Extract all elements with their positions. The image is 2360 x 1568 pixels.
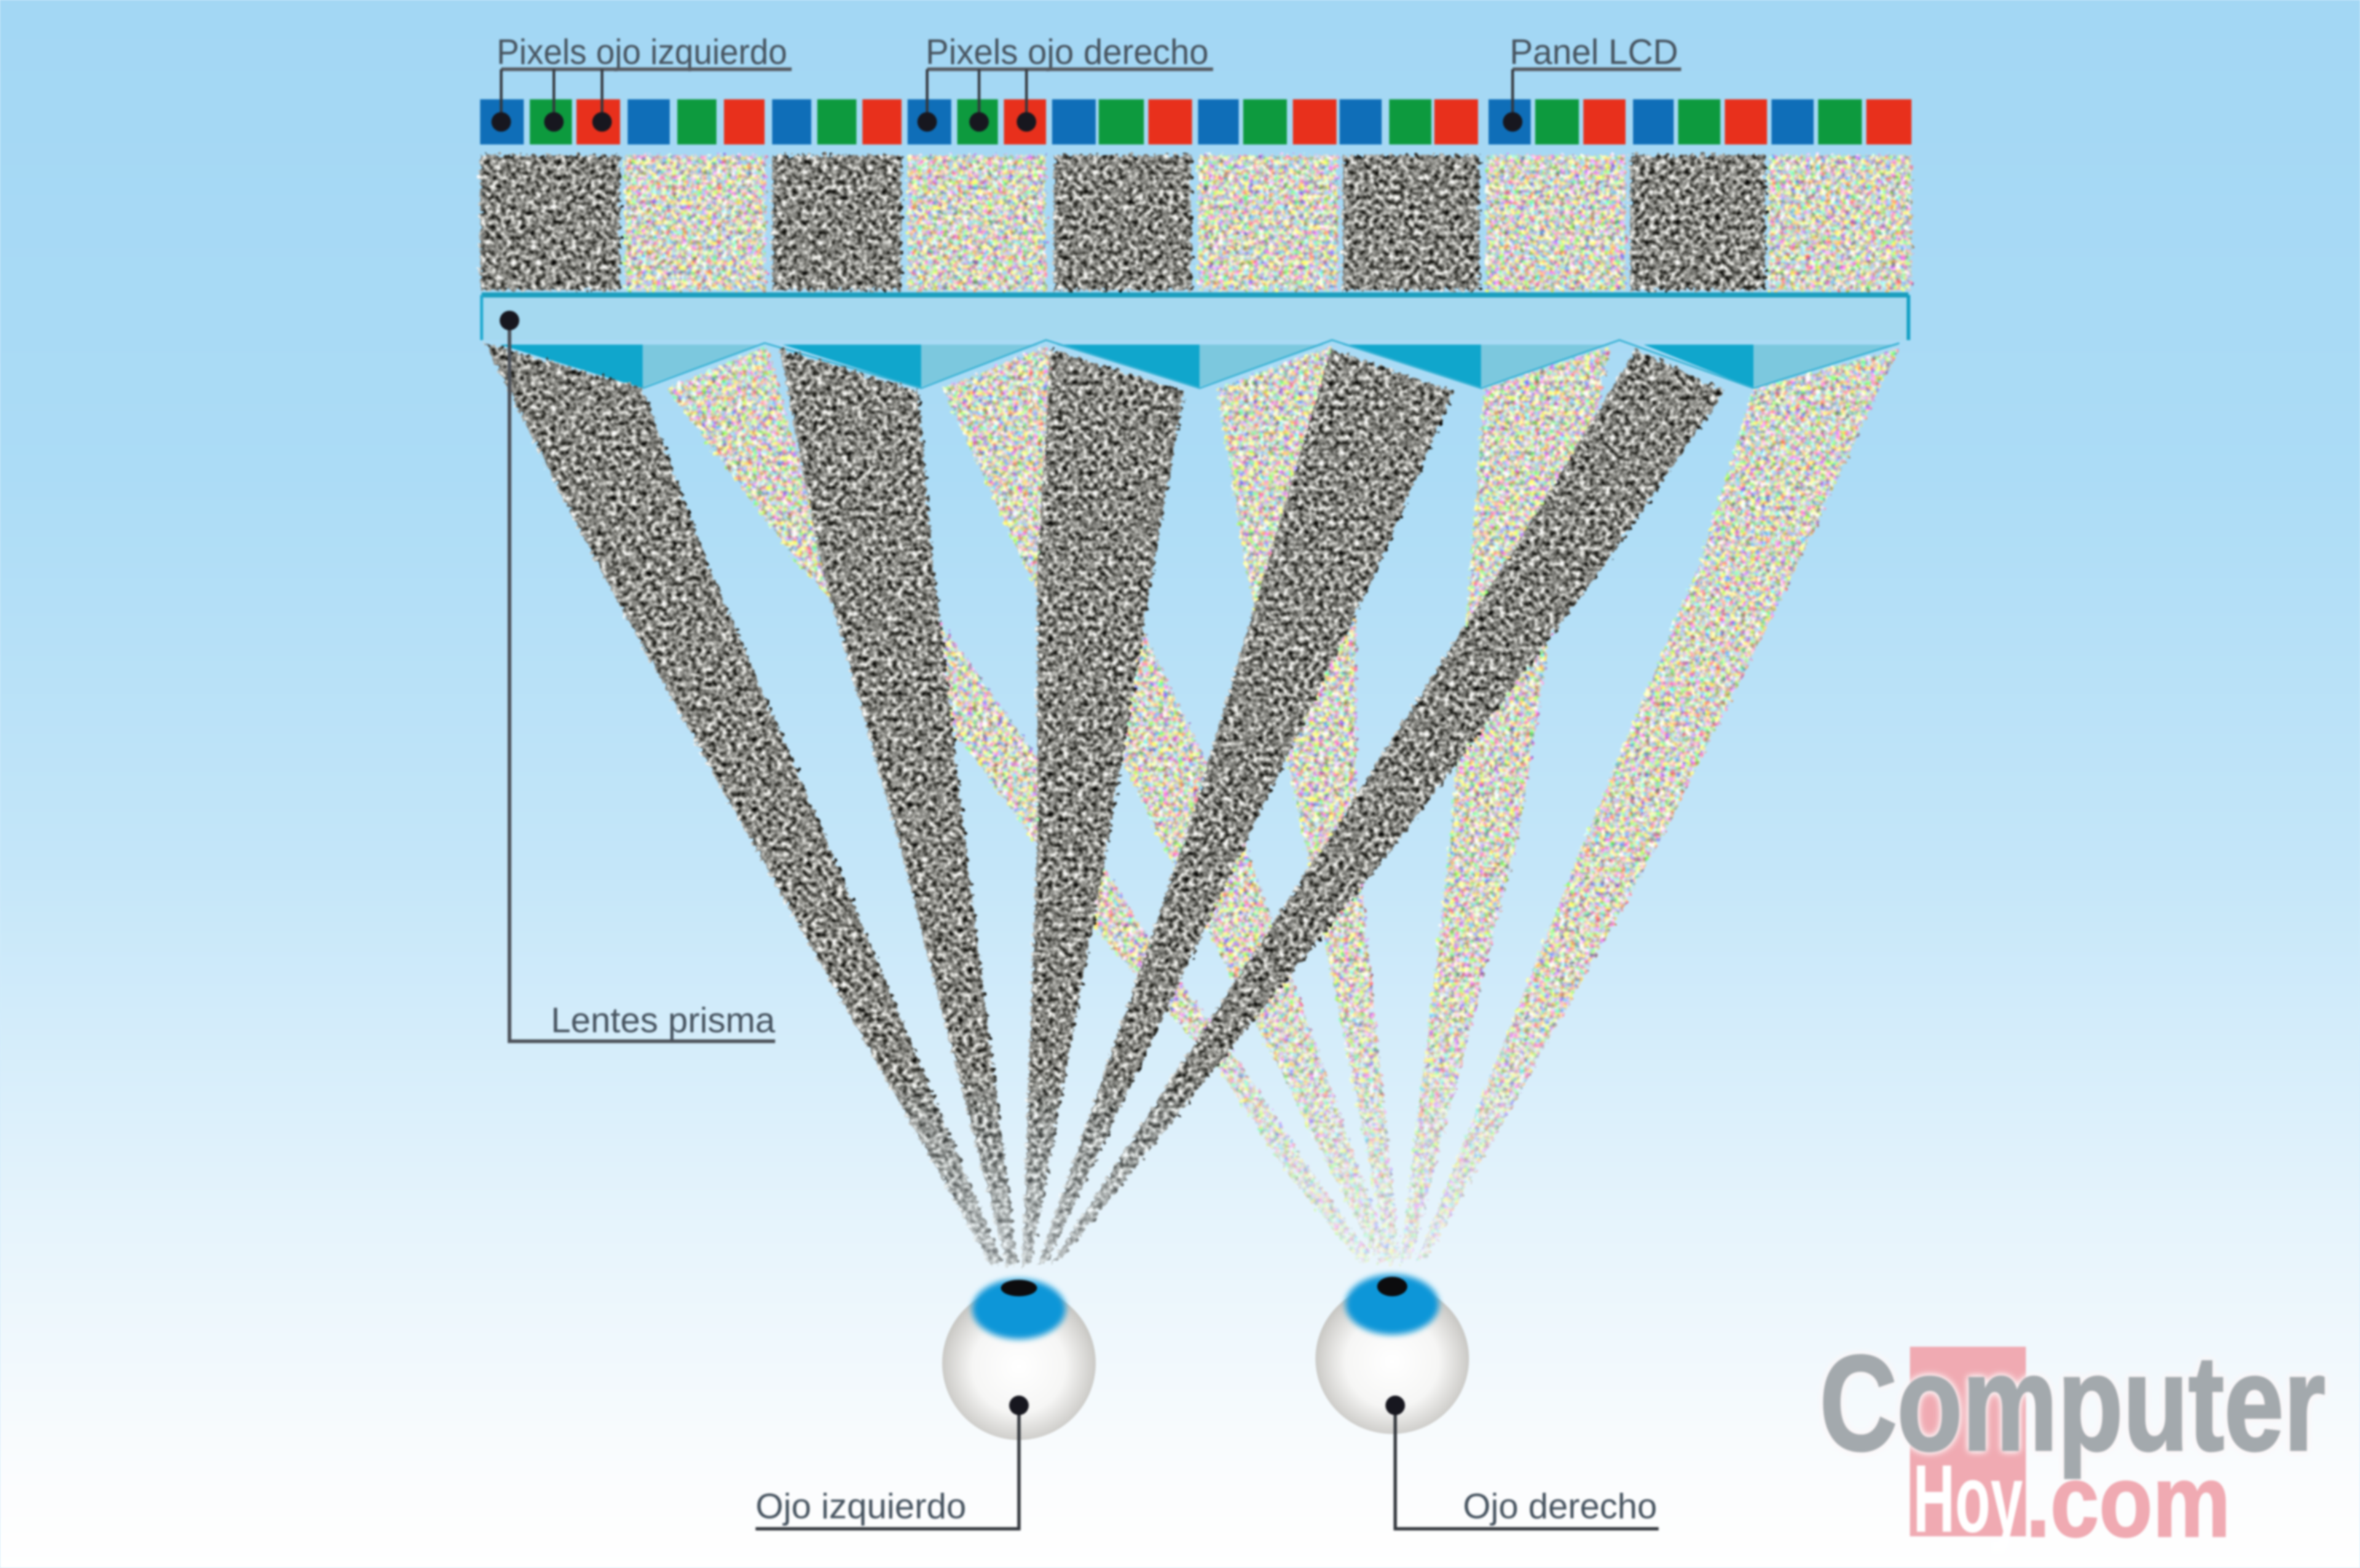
dark beams toward left eye [485,343,1725,1267]
lens outline [482,294,1908,296]
eyeball [942,1287,1096,1440]
icon: left eye [942,1279,1096,1440]
pupil [1001,1280,1037,1296]
callout: Ojo izquierdo [755,1395,1029,1529]
callout: Ojo izquierdo: Ojo izquierdo [755,1487,966,1526]
light beam 3 [1217,346,1400,1264]
dark image columns [480,155,1766,291]
light beam 2 [942,346,1391,1264]
noise blocks of the LCD image [480,155,1911,291]
callout: Lentes prisma: Lentes prisma [551,1001,775,1040]
icon: right eye [1315,1274,1469,1434]
eyeball [1315,1284,1469,1434]
dark beam 2 [780,349,1018,1267]
light beams toward right eye [667,346,1898,1264]
light image columns [624,155,1911,291]
callout: Panel LCD: Panel LCD [1509,33,1678,72]
callout: Pixels ojo izquierdo: Pixels ojo izquierdo [497,33,787,72]
dark beam 3 [1022,349,1184,1267]
prism lens bar [482,295,1908,388]
callout: Ojo derecho: Ojo derecho [1463,1487,1657,1526]
logo word .com: .com [2026,1444,2230,1558]
RGB subpixel row [480,100,1911,144]
callout: Pixels ojo derecho: Pixels ojo derecho [926,33,1209,72]
callout: Ojo derecho [1385,1395,1659,1529]
pupil [1377,1277,1407,1296]
callout: Pixels ojo derecho [918,33,1213,131]
light beam 4 [1400,346,1610,1264]
logo: ComputerHoy.com [1820,1327,2326,1558]
dark beam 5 [1050,349,1725,1264]
logo word Hoy: Hoy [1913,1445,2023,1553]
dark beam 1 [485,343,1002,1267]
iris [1345,1274,1439,1335]
lens pale sections [643,345,1900,386]
callout: Pixels ojo izquierdo [492,33,792,131]
light beam 1 [667,346,1372,1264]
callout: Panel LCD [1503,33,1682,131]
logo red block [1910,1347,2026,1536]
callout: Lentes prisma [500,311,775,1041]
lens teal sections [500,345,1753,388]
iris [972,1279,1066,1339]
bar body [482,295,1908,340]
light beam 5 [1415,349,1898,1264]
dark beam 4 [1037,349,1454,1267]
